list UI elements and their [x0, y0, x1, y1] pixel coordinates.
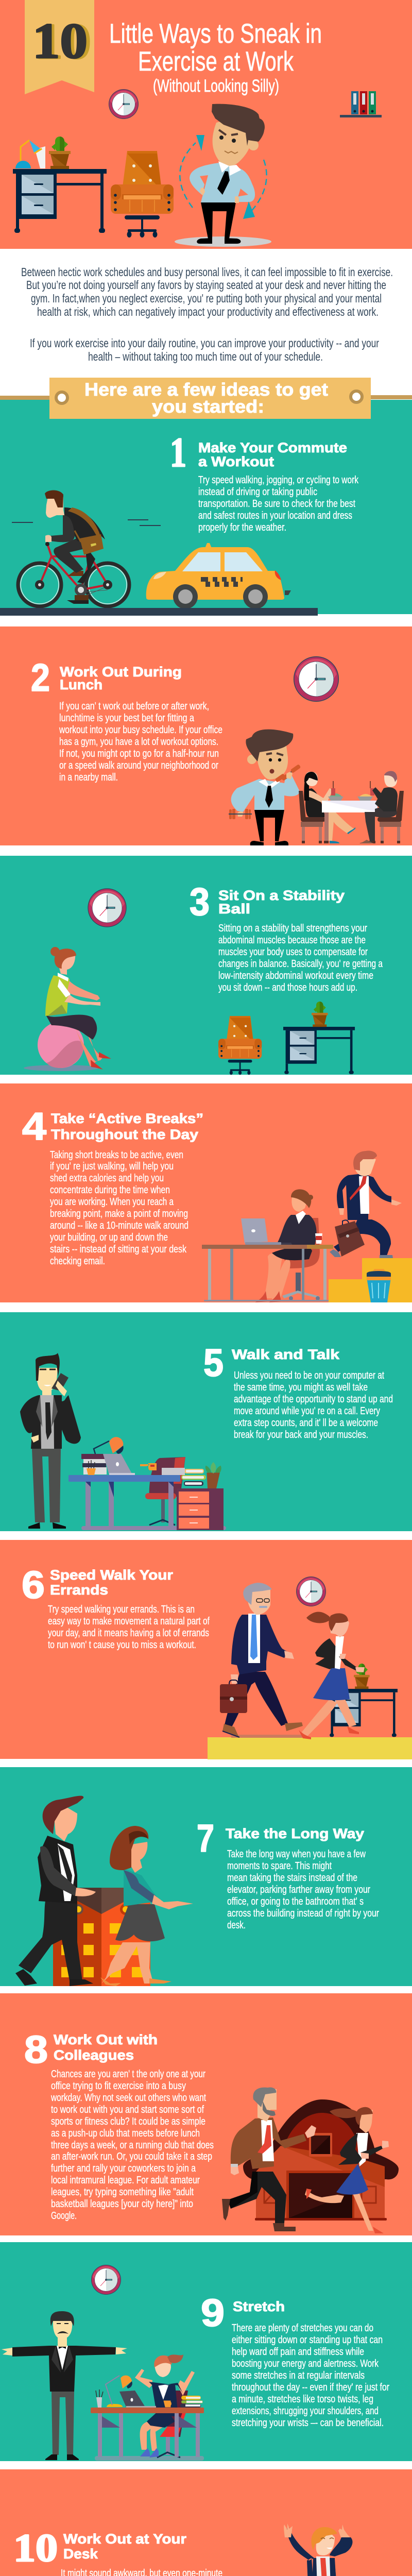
text block: office, or going to the bathroom that' s [227, 1896, 364, 1907]
woman stretching at desk [91, 2354, 204, 2461]
heading [60, 664, 182, 692]
text block: If you can' t work out before or after work, [59, 701, 209, 712]
text block: help ward off pain and stiffness while [232, 2346, 364, 2358]
text block: leagues, try typing something like "adult [51, 2187, 194, 2198]
text block: break for your back and your muscles. [234, 1429, 368, 1440]
heading: Sit On a Stability [218, 888, 345, 903]
heading: Speed Walk Your [50, 1567, 174, 1583]
heading: Walk and Talk [232, 1347, 340, 1362]
text block: checking email. [50, 1256, 105, 1267]
heading: Ball [218, 901, 250, 917]
panel: tip 5 walk and talk [0, 1312, 412, 1531]
text block: your day, and it means having a lot of errands [48, 1628, 209, 1639]
text block [50, 1149, 188, 1267]
text block: transportation. Be sure to check for the best [198, 498, 355, 510]
number 9: 9 [201, 2291, 225, 2334]
text block: a minute, stretches like torso twists, leg [232, 2394, 373, 2405]
woman walking with cactus [299, 1612, 365, 1739]
text block: you are working. When you reach a [50, 1196, 174, 1208]
number 10: 10 [13, 2527, 58, 2570]
heading: Take “Active Breaks” [51, 1111, 203, 1126]
cyclist [12, 490, 161, 606]
text block: Sitting on a stability ball strengthens your [218, 923, 367, 934]
text block: office trying to fit exercise into a busy [51, 2080, 186, 2092]
man on phone [20, 1353, 81, 1529]
text block: further and rally your coworkers to join a [51, 2163, 196, 2174]
heading: Errands [50, 1582, 108, 1598]
arrows around the man [180, 143, 267, 212]
barn [243, 2099, 399, 2221]
panel: tip 8 colleagues [0, 1993, 412, 2235]
heading: a Workout [198, 454, 274, 469]
panel: tip 6 speed walk [0, 1540, 412, 1759]
text block: desk. [227, 1920, 246, 1931]
text block: Google. [51, 2210, 77, 2222]
steps and trash can [329, 1258, 412, 1302]
number 7: 7 [197, 1817, 214, 1860]
ribbon badge with number 10 [25, 0, 94, 94]
text block: you sit down -- and those hours add up. [218, 982, 357, 993]
heading [51, 1111, 203, 1142]
text block: concentrate during the time when [50, 1184, 170, 1196]
desk scene with laptop, lamp and drawers [68, 1437, 226, 1530]
desk with cactus [329, 1664, 398, 1737]
text block: mean taking the stairs instead of the [227, 1872, 357, 1884]
text block: around -- like a 10-minute walk around [50, 1220, 188, 1231]
text block: stairs -- instead of sitting at your desk [50, 1244, 187, 1255]
text block: lunchtime is your best bet for fitting a [59, 713, 195, 724]
title: (Without Looking Silly) [153, 76, 279, 96]
text block: your building, or up and down the [50, 1232, 168, 1243]
text block: low-intensity abdominal workout every time [218, 970, 373, 981]
heading: Make Your Commute [198, 440, 347, 455]
text block: Try speed walking your errands. This is an [48, 1604, 195, 1615]
icon: clock [296, 1577, 326, 1606]
angry man twisting torso [175, 104, 271, 247]
text block: sports or fitness club? It could be as simple [51, 2116, 205, 2127]
text block: workday. Why not seek out others who want [50, 2092, 206, 2104]
text block: Take the long way when you have a few [227, 1849, 366, 1860]
businessman walking with briefcase [220, 1583, 303, 1738]
text block: has a gym, you have a lot of workout options. [59, 736, 218, 748]
text block: easy way to make movement a natural part of [48, 1616, 210, 1627]
number 4: 4 [22, 1105, 46, 1148]
icon: clock [88, 888, 127, 927]
heading: Stretch [233, 2299, 285, 2314]
intro text [21, 265, 393, 363]
text block: breaking point, make a point of moving [50, 1208, 188, 1219]
text block [50, 2069, 214, 2222]
number 3: 3 [190, 880, 210, 923]
road [0, 608, 318, 616]
man climbing steps with briefcase [330, 1150, 402, 1258]
title: Exercise at Work [138, 46, 294, 77]
text block: if you' re just walking, will help you [50, 1161, 174, 1172]
text block: to work out with you and start some sort of [51, 2104, 204, 2115]
desk with lamp and cactus [13, 137, 107, 233]
panel: tip 3 stability ball [0, 856, 412, 1075]
panel: tip 10 desk [0, 2469, 412, 2576]
text block: moments to spare. This might [227, 1860, 332, 1872]
banner: ideas to get started: Here are a few ideas to get [84, 380, 328, 400]
number 8: 8 [24, 2028, 48, 2071]
text block [218, 923, 383, 993]
text block: an after-work run. Or, you could take it a step [51, 2151, 212, 2162]
heading [54, 2032, 158, 2063]
icon: wall clock [109, 89, 139, 119]
banner: ideas to get started [0, 378, 412, 419]
number 6: 6 [22, 1563, 45, 1606]
panel: tip 1 commute [0, 378, 412, 616]
ground [208, 1737, 412, 1759]
chair and desk [218, 1002, 355, 1075]
text block [232, 2323, 389, 2429]
title [109, 19, 322, 96]
heading [63, 2531, 187, 2562]
heading: Take the Long Way [226, 1826, 364, 1841]
panel: tip 9 stretch [0, 2242, 412, 2461]
text block: to run won' t cause you to miss a workout. [48, 1639, 196, 1651]
heading: Colleagues [54, 2047, 134, 2063]
text block: the same time, you might as well take [234, 1382, 368, 1393]
icon: binders on shelf [340, 91, 382, 117]
text block: three days a week, or a running club that does [51, 2140, 214, 2151]
text block: some stretches in at regular intervals [232, 2370, 365, 2381]
text block [198, 474, 359, 533]
text block: elevator, parking farther away from your [227, 1884, 370, 1895]
number 5: 5 [203, 1341, 224, 1384]
text block: muscles your body uses to compensate for [218, 946, 368, 958]
woman on stability ball [24, 947, 111, 1071]
text block: If not, you might opt to go for a half-hour run [59, 748, 219, 759]
panel: header [0, 0, 412, 249]
woman walking [100, 1826, 193, 1986]
heading [50, 1567, 174, 1598]
text block: in a nearby mall. [59, 772, 118, 783]
text block: basketball leagues [your city here]" into [51, 2198, 193, 2210]
text block: or a speed walk around your neighborhood or [59, 760, 218, 771]
title: Little Ways to Sneak in [109, 19, 322, 49]
text block: Chances are you aren' t the only one at your [51, 2069, 205, 2080]
panel: tip 4 active breaks [0, 1083, 412, 1302]
man lifting dumbbells [229, 730, 301, 845]
office chair [111, 151, 174, 238]
heading: Work Out at Your [63, 2531, 187, 2547]
heading [218, 888, 345, 917]
icon: clock [294, 656, 339, 702]
heading: Lunch [60, 677, 102, 692]
number 2: 2 [31, 656, 50, 699]
diners at table [299, 771, 404, 843]
text block: shed extra calories and help you [50, 1173, 164, 1184]
text block: local intramural league. For adult amateur [51, 2175, 200, 2186]
text block: workout into your busy schedule. If your office [59, 724, 222, 736]
bearded man running [222, 2088, 316, 2231]
text block: There are plenty of stretches you can do [232, 2323, 373, 2334]
number 1: 1 [170, 430, 186, 476]
heading: Throughout the Day [51, 1127, 198, 1142]
text block [234, 1370, 393, 1440]
intro text: health – without taking too much time out of your schedule. [88, 350, 323, 363]
taxi [146, 543, 291, 609]
woman running [305, 2107, 389, 2233]
heading: Work Out with [54, 2032, 158, 2047]
text block [227, 1849, 379, 1931]
man stretching arms out [2, 2311, 127, 2460]
text block [48, 1604, 210, 1651]
text block: properly for the weather. [198, 522, 286, 533]
panel: tip 2 lunch [0, 626, 412, 845]
text block [59, 701, 222, 783]
text block: and safest routes in your location and dress [198, 510, 352, 521]
heading [198, 440, 347, 469]
heading: Desk [63, 2546, 98, 2562]
text block: Try speed walking, jogging, or cycling to work [198, 474, 359, 486]
man at desk with raised arms [236, 2523, 396, 2576]
building [53, 1888, 150, 1986]
banner: ideas to get started: you started: [152, 397, 264, 417]
text block: as a push-up club that meets before lunch [51, 2128, 200, 2139]
woman working at desk [202, 1189, 337, 1302]
panel: tip 7 long way [0, 1767, 412, 1986]
text block: abdominal muscles because those are the [218, 935, 366, 946]
icon: clock [91, 2265, 121, 2295]
ribbon badge with number 10: 10 [32, 13, 88, 69]
man walking in suit [15, 1796, 96, 1986]
heading: Work Out During [60, 664, 182, 680]
text block: Taking short breaks to be active, even [50, 1149, 183, 1161]
ribbon badge with number 10: 10 [35, 14, 91, 70]
text block: instead of driving or taking public [198, 486, 317, 498]
